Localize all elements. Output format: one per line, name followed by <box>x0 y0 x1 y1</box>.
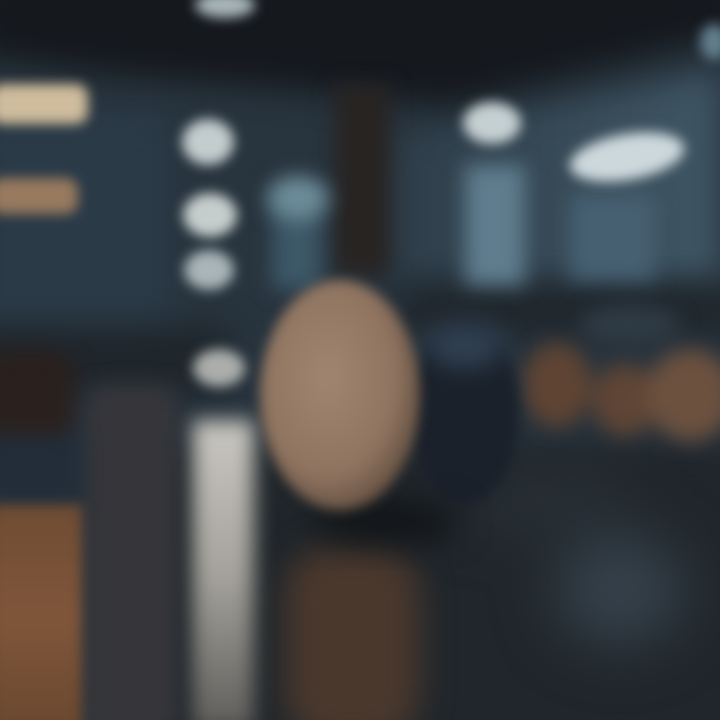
ceiling <box>0 0 720 105</box>
main tan egg <box>260 280 420 510</box>
left grey column <box>85 385 177 720</box>
ceiling lights <box>195 0 720 190</box>
brown reflection <box>285 545 420 720</box>
window light <box>268 176 328 220</box>
warm wall lights <box>0 84 88 214</box>
left brown block <box>0 505 82 720</box>
right wall <box>390 70 720 285</box>
central dark column <box>335 85 390 275</box>
left dark object <box>0 350 80 500</box>
column of white lights <box>182 119 245 387</box>
glowing wall panels <box>272 165 655 290</box>
bright floor strip <box>192 420 254 720</box>
ball shadow <box>310 500 460 544</box>
left wall <box>0 110 230 395</box>
floor <box>160 445 720 720</box>
floor sheen <box>450 475 685 645</box>
mid wall shadow band <box>400 285 720 335</box>
right brown balls <box>523 305 720 441</box>
dark ball <box>411 320 519 504</box>
